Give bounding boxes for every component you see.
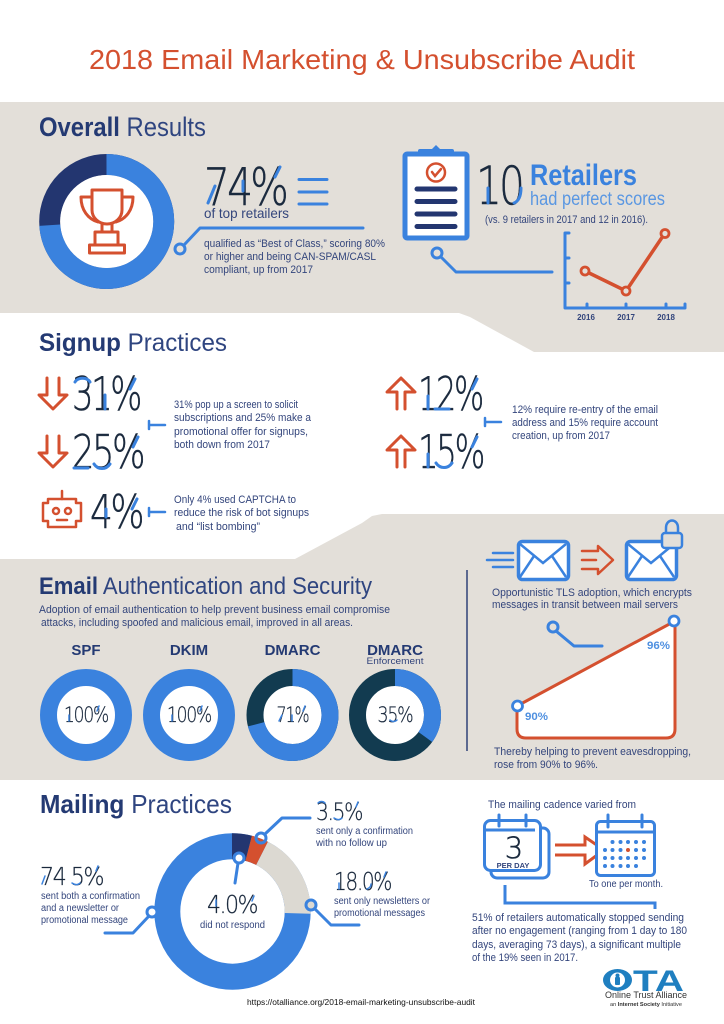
panel: mailing practices: [40, 789, 687, 1008]
text: eavesdropping description: rose from 90% to 96%.: [494, 759, 598, 771]
icon: calendar 3 per day: PER DAY: [497, 861, 529, 870]
panel background: overall results: [0, 102, 724, 352]
text: re-entry description: 12% require re-entry of the email: [512, 404, 658, 416]
stat: 4 percent did not respond: did not respond: [200, 919, 265, 931]
logo: Online Trust Alliance: TA: [633, 965, 684, 998]
text: re-entry description: address and 15% require account: [512, 417, 658, 429]
connector: re-entry: [485, 418, 501, 426]
line chart: perfect scores by year: 2018: [657, 313, 675, 322]
text: captcha description: Only 4% used CAPTCHA to: [174, 494, 296, 506]
text: best of class description: [204, 238, 385, 276]
icon: locked envelope: [626, 520, 682, 580]
text: captcha description: reduce the risk of bot signups: [174, 507, 309, 519]
icon: cadence arrow: [555, 837, 604, 864]
stat: 10 retailers: had perfect scores: [530, 189, 665, 210]
text: adoption description: Adoption of email authentication to help prevent business email compromise: [39, 604, 390, 616]
stat: 4 percent: 4%: [90, 485, 142, 539]
icon: robot: [43, 491, 81, 527]
text: popups description: both down from 2017: [174, 439, 270, 451]
stat: 74.5 percent: and a newsletter or: [41, 903, 120, 914]
label: to one per month: To one per month.: [589, 879, 663, 890]
stat: 4 percent did not respond: [200, 890, 265, 931]
stat: 74.5 percent: 74 5%: [40, 862, 103, 891]
connector: did not respond: [234, 853, 244, 883]
heading: mailing practices: Mailing Practices: [40, 789, 232, 819]
stat: 15 percent: 15%: [418, 425, 483, 479]
stat: 12 percent: [418, 367, 482, 421]
stat: 12 percent: 12%: [418, 367, 482, 421]
text: re-entry description: [512, 404, 658, 442]
line chart: perfect scores by year: 2016: [577, 313, 595, 322]
donut: SPF 100 percent: SPF: [71, 642, 101, 659]
donut: DMARC enforcement 35 percent: [358, 642, 432, 752]
connector: both: [105, 907, 157, 933]
icon: calendar 3 per day: [484, 815, 549, 878]
stat: 3.5 percent: with no follow up: [315, 838, 387, 849]
connector: best of class: [175, 228, 363, 254]
icon: down arrow: [39, 378, 67, 409]
icon: clipboard: [405, 145, 467, 238]
text: re-entry description: creation, up from 2017: [512, 430, 610, 442]
stat: 74.5 percent: sent both a confirmation: [41, 891, 140, 902]
stat: 4 percent did not respond: 4.0%: [207, 890, 257, 919]
text: engagement description: days, averaging 73 days), a significant multiple: [472, 939, 681, 951]
stat: 18 percent: sent only newsletters or: [334, 896, 431, 907]
title: 2018 Email Marketing & Unsubscribe Audit: [89, 44, 635, 75]
icon: up arrow: [387, 436, 415, 467]
stat: 18 percent: promotional messages: [334, 908, 425, 919]
heading: overall results: Overall Results: [39, 112, 206, 142]
icon: red arrow: [582, 546, 613, 574]
text: popups description: subscriptions and 25% make a: [174, 412, 312, 424]
stat: 10 retailers: [476, 156, 665, 226]
text: best of class description: or higher and being CAN-SPAM/CASL: [204, 251, 376, 263]
donut: DMARC 71 percent: DMARC: [265, 642, 321, 659]
stat: 74.5 percent: promotional message: [41, 915, 128, 926]
donut: DKIM 100 percent: DKIM: [170, 642, 208, 659]
donut: SPF 100 percent: 100%: [64, 703, 108, 727]
stat: 31 percent: 31%: [72, 367, 140, 421]
stat: 10 retailers: (vs. 9 retailers in 2017 and 12 in 2016).: [485, 214, 648, 226]
heading: signup practices: Signup Practices: [39, 329, 227, 357]
logo: Online Trust Alliance: [603, 965, 687, 1008]
stat: 10 retailers: 10: [476, 156, 522, 217]
icon: moving envelope: [487, 542, 568, 580]
stat: 25 percent: 25%: [72, 425, 143, 479]
stat: 18 percent: 18.0%: [334, 867, 391, 896]
stat: 18 percent: [334, 867, 431, 919]
area chart: TLS 90 to 96 percent: [512, 616, 679, 738]
text: mailing cadence: The mailing cadence varied from: [488, 799, 636, 811]
connector: captcha: [149, 508, 165, 516]
stat: 74 percent: 74%: [204, 158, 286, 218]
stat: 3.5 percent: [315, 798, 413, 849]
donut chart: mailing practices: [167, 846, 298, 977]
text: engagement description: of the 19% seen in 2017.: [472, 952, 578, 964]
panel: signup practices: [39, 329, 658, 539]
icon: down arrow: [39, 436, 67, 467]
donut: SPF 100 percent: [48, 642, 124, 752]
text: captcha description: and “list bombing”: [176, 521, 260, 533]
text: eavesdropping description: Thereby helping to prevent eavesdropping,: [494, 746, 691, 758]
panel: overall results: [39, 112, 685, 322]
heading: email authentication and security: Email Authentication and Security: [39, 573, 372, 600]
text: eavesdropping description: [494, 746, 691, 771]
icon: monthly calendar: [596, 815, 654, 876]
donut: DKIM 100 percent: [152, 642, 226, 752]
panel background: email authentication: [0, 514, 724, 780]
donut: DKIM 100 percent: 100%: [167, 703, 211, 727]
connector: confirmation only: [256, 818, 310, 843]
area chart: TLS 90 to 96 percent: 96%: [647, 640, 670, 652]
donut: DMARC 71 percent: [255, 642, 330, 752]
connector: retailers to chart: [432, 248, 552, 272]
area chart: TLS 90 to 96 percent: 90%: [525, 711, 548, 723]
donut: DMARC enforcement 35 percent: Enforcement: [366, 656, 424, 666]
connector: cadence bracket: [505, 885, 655, 909]
panel: email authentication and security: [39, 520, 692, 771]
connector: newsletters only: [306, 900, 359, 925]
text: popups description: promotional offer for signups,: [174, 426, 308, 438]
text: popups description: [174, 399, 312, 451]
source URL: https://otalliance.org/2018-email-marketing-unsubscribe-audit: [247, 997, 476, 1007]
line chart: perfect scores by year: [565, 230, 685, 322]
text: adoption description: attacks, including spoofed and malicious email, improved in all areas.: [41, 617, 353, 629]
stat: 3.5 percent: 3.5%: [316, 798, 363, 826]
text: TLS description: [492, 587, 692, 611]
label: of top retailers: of top retailers: [204, 205, 289, 221]
text: best of class description: compliant, up from 2017: [204, 264, 313, 276]
text: engagement description: after no engagement (ranging from 1 day to 180: [472, 925, 687, 937]
text: engagement description: [472, 912, 687, 964]
text: TLS description: Opportunistic TLS adoption, which encrypts: [492, 587, 692, 599]
text: best of class description: qualified as “Best of Class,” scoring 80%: [204, 238, 385, 250]
text: engagement description: 51% of retailers automatically stopped sending: [472, 912, 684, 924]
donut: DMARC 71 percent: 71%: [276, 703, 309, 727]
connector: TLS to chart: [548, 622, 602, 646]
stat: 74.5 percent: [40, 862, 140, 926]
divider: [466, 570, 468, 751]
donut: DMARC enforcement 35 percent: DMARC: [367, 642, 423, 659]
text: popups description: 31% pop up a screen to solicit: [174, 399, 298, 411]
icon: up arrow: [387, 378, 415, 409]
text: captcha description: [174, 494, 309, 533]
stat: 10 retailers: Retailers: [530, 159, 637, 192]
text: adoption description: [39, 604, 390, 629]
text: TLS description: messages in transit between mail servers: [492, 599, 678, 611]
logo: Online Trust Alliance: an Internet Society Initiative: [610, 1002, 682, 1008]
icon: equals lines: [299, 180, 327, 204]
line chart: perfect scores by year: 2017: [617, 313, 635, 322]
connector: signup popups: [149, 421, 165, 429]
icon: calendar 3 per day: 3: [505, 831, 521, 865]
logo: Online Trust Alliance: Online Trust Alliance: [605, 990, 687, 1001]
donut: DMARC enforcement 35 percent: 35%: [378, 703, 413, 727]
icon: trophy: [81, 190, 133, 253]
stat: 3.5 percent: sent only a confirmation: [316, 826, 413, 837]
donut chart: 74 percent: [50, 164, 164, 278]
